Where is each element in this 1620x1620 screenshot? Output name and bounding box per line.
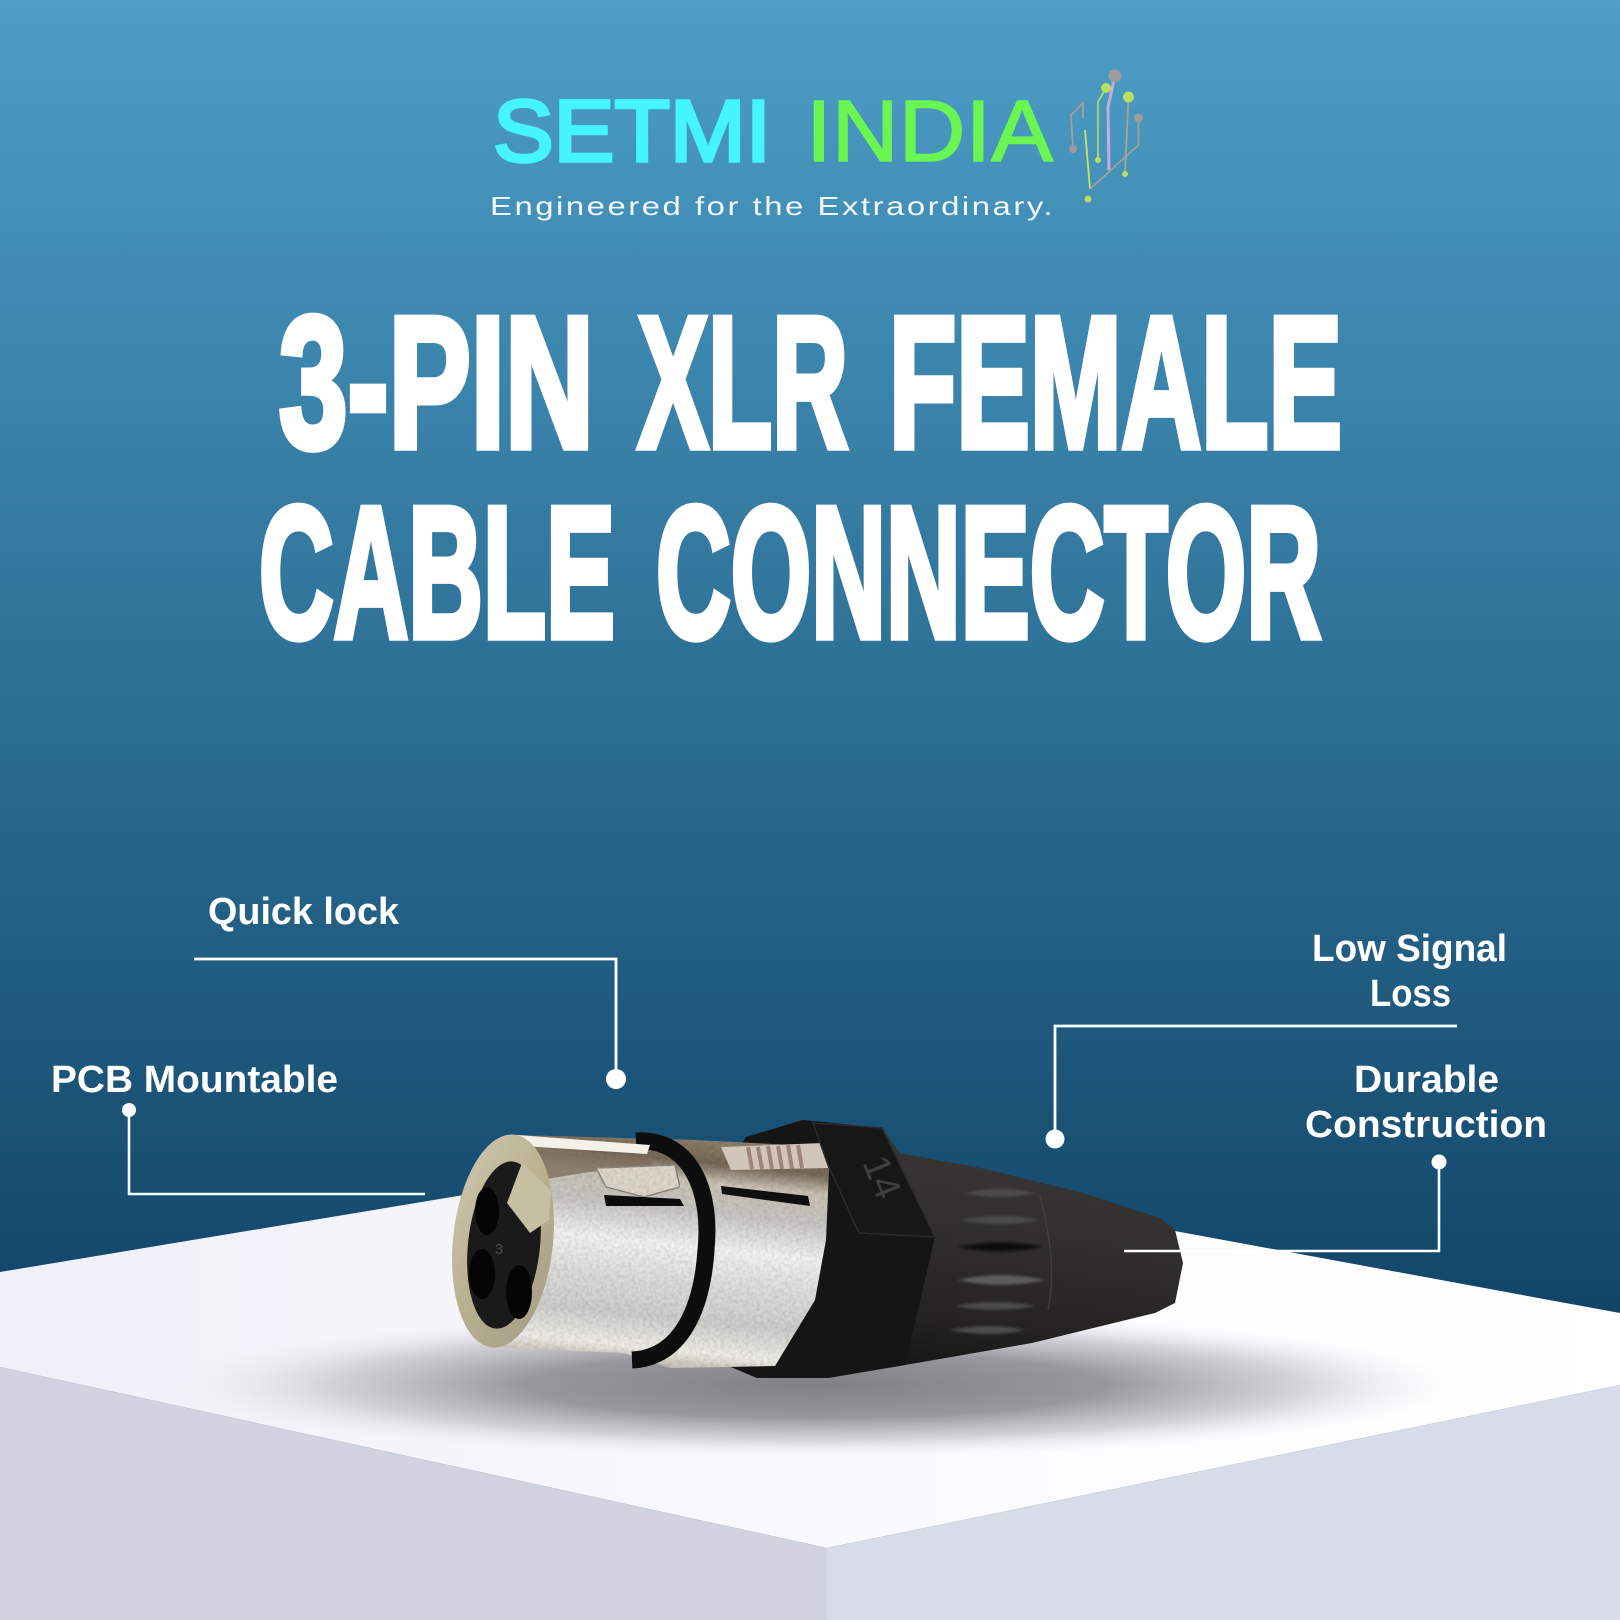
- platform top face: [0, 1150, 1620, 1548]
- connector product image: [442, 1120, 1183, 1378]
- Durable Construction callout line overlay on boot: [1124, 1250, 1180, 1252]
- connector key wedge: [507, 1163, 551, 1233]
- title: [259, 278, 1342, 677]
- title: CABLE: [259, 468, 615, 677]
- connector top highlight tab: [517, 1135, 650, 1154]
- logo wordmark SETMI: SETMI: [493, 83, 771, 180]
- connector pin number: 3: [495, 1241, 503, 1258]
- callout: Quick lock: [194, 891, 626, 1089]
- platform left face: [0, 1367, 827, 1620]
- connector dark hex collar: [700, 1120, 935, 1378]
- connector hex label face: [813, 1123, 935, 1237]
- connector ridged latch: [721, 1143, 828, 1206]
- callout label: PCB Mountable: PCB Mountable: [51, 1059, 338, 1101]
- callout: Low Signal Loss: Low Signal: [1312, 928, 1507, 970]
- connector black boot and hex collar: [700, 1120, 1183, 1378]
- connector embossed marking: 14: [854, 1150, 909, 1205]
- callout label: Durable Construction: Durable: [1354, 1059, 1499, 1101]
- callout: Quick lock: Quick lock: [208, 891, 400, 933]
- connector small lock tab: [596, 1165, 680, 1197]
- connector lock slot: [604, 1195, 684, 1206]
- callout: Low Signal Loss: [1046, 928, 1507, 1148]
- logo tagline: Engineered for the Extraordinary.: [490, 191, 1055, 221]
- connector pin holes: [469, 1187, 532, 1319]
- callout: Low Signal Loss: Loss: [1370, 973, 1451, 1015]
- connector boot seam: [1040, 1196, 1052, 1310]
- title: XLR: [638, 278, 848, 487]
- platform: [0, 1150, 1620, 1620]
- callout label: Durable Construction: Construction: [1305, 1104, 1547, 1146]
- title: 3-PIN: [279, 278, 594, 487]
- connector shadow: [175, 1313, 1455, 1457]
- connector metal shell: [497, 1135, 830, 1368]
- platform right face: [827, 1385, 1620, 1620]
- logo: SETMI INDIA: [490, 70, 1143, 221]
- logo icon: circuit traces: [1069, 70, 1143, 202]
- connector ring: [632, 1141, 707, 1360]
- PCB Mountable callout line: [122, 1103, 425, 1194]
- connector face insert: [459, 1158, 549, 1332]
- callout label: Durable Construction: [1305, 1059, 1547, 1146]
- connector face rim: [442, 1129, 564, 1353]
- connector brown reflection under tab: [530, 1150, 655, 1180]
- connector boot ribs: [950, 1189, 1045, 1334]
- Durable Construction callout line underlay: [1124, 1154, 1446, 1251]
- logo wordmark INDIA: INDIA: [806, 83, 1053, 180]
